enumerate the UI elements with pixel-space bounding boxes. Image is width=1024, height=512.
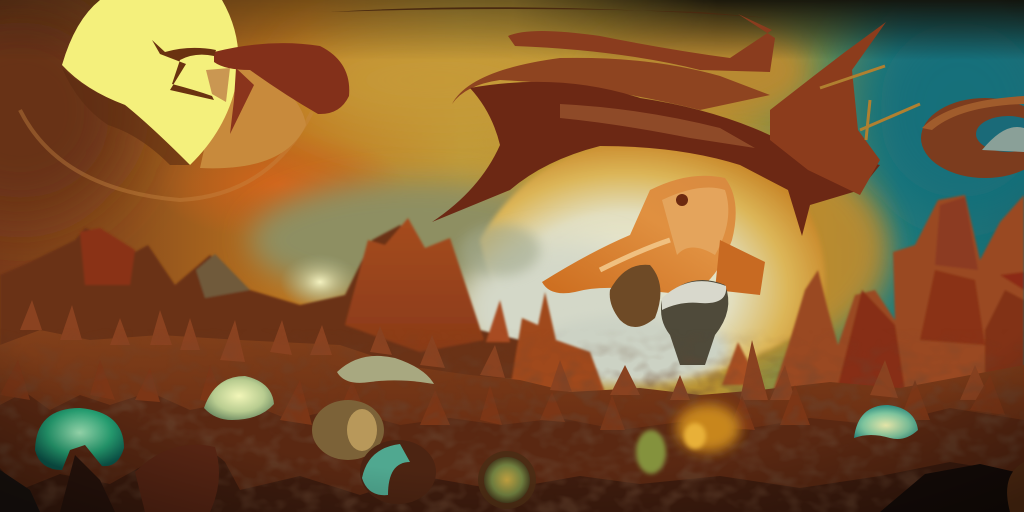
orb: golden round [478,451,536,509]
foreground terrain [0,300,1024,512]
orb: teal [360,440,436,504]
painted texture over terrain [0,337,1018,512]
orb: green left [35,408,124,470]
ring shape on right edge [921,96,1024,178]
orb: right teal [854,405,918,439]
glowing sun disc [20,0,312,200]
flames [676,404,740,452]
sky background [0,0,1024,395]
small flying creature over sun [152,40,349,134]
moon and mist behind dragon [280,138,890,384]
orb: dome [337,356,434,384]
right side spires [770,195,1024,440]
orb: small green [636,430,666,474]
floating orange creature and skull [542,176,765,365]
dark foreground shapes [0,445,1024,512]
large dragon wings and body [330,7,920,236]
orb: amber left of centre [312,400,384,460]
distant mountains [0,218,760,395]
orb: pale [204,376,274,420]
flames and glowing orbs [35,356,918,509]
